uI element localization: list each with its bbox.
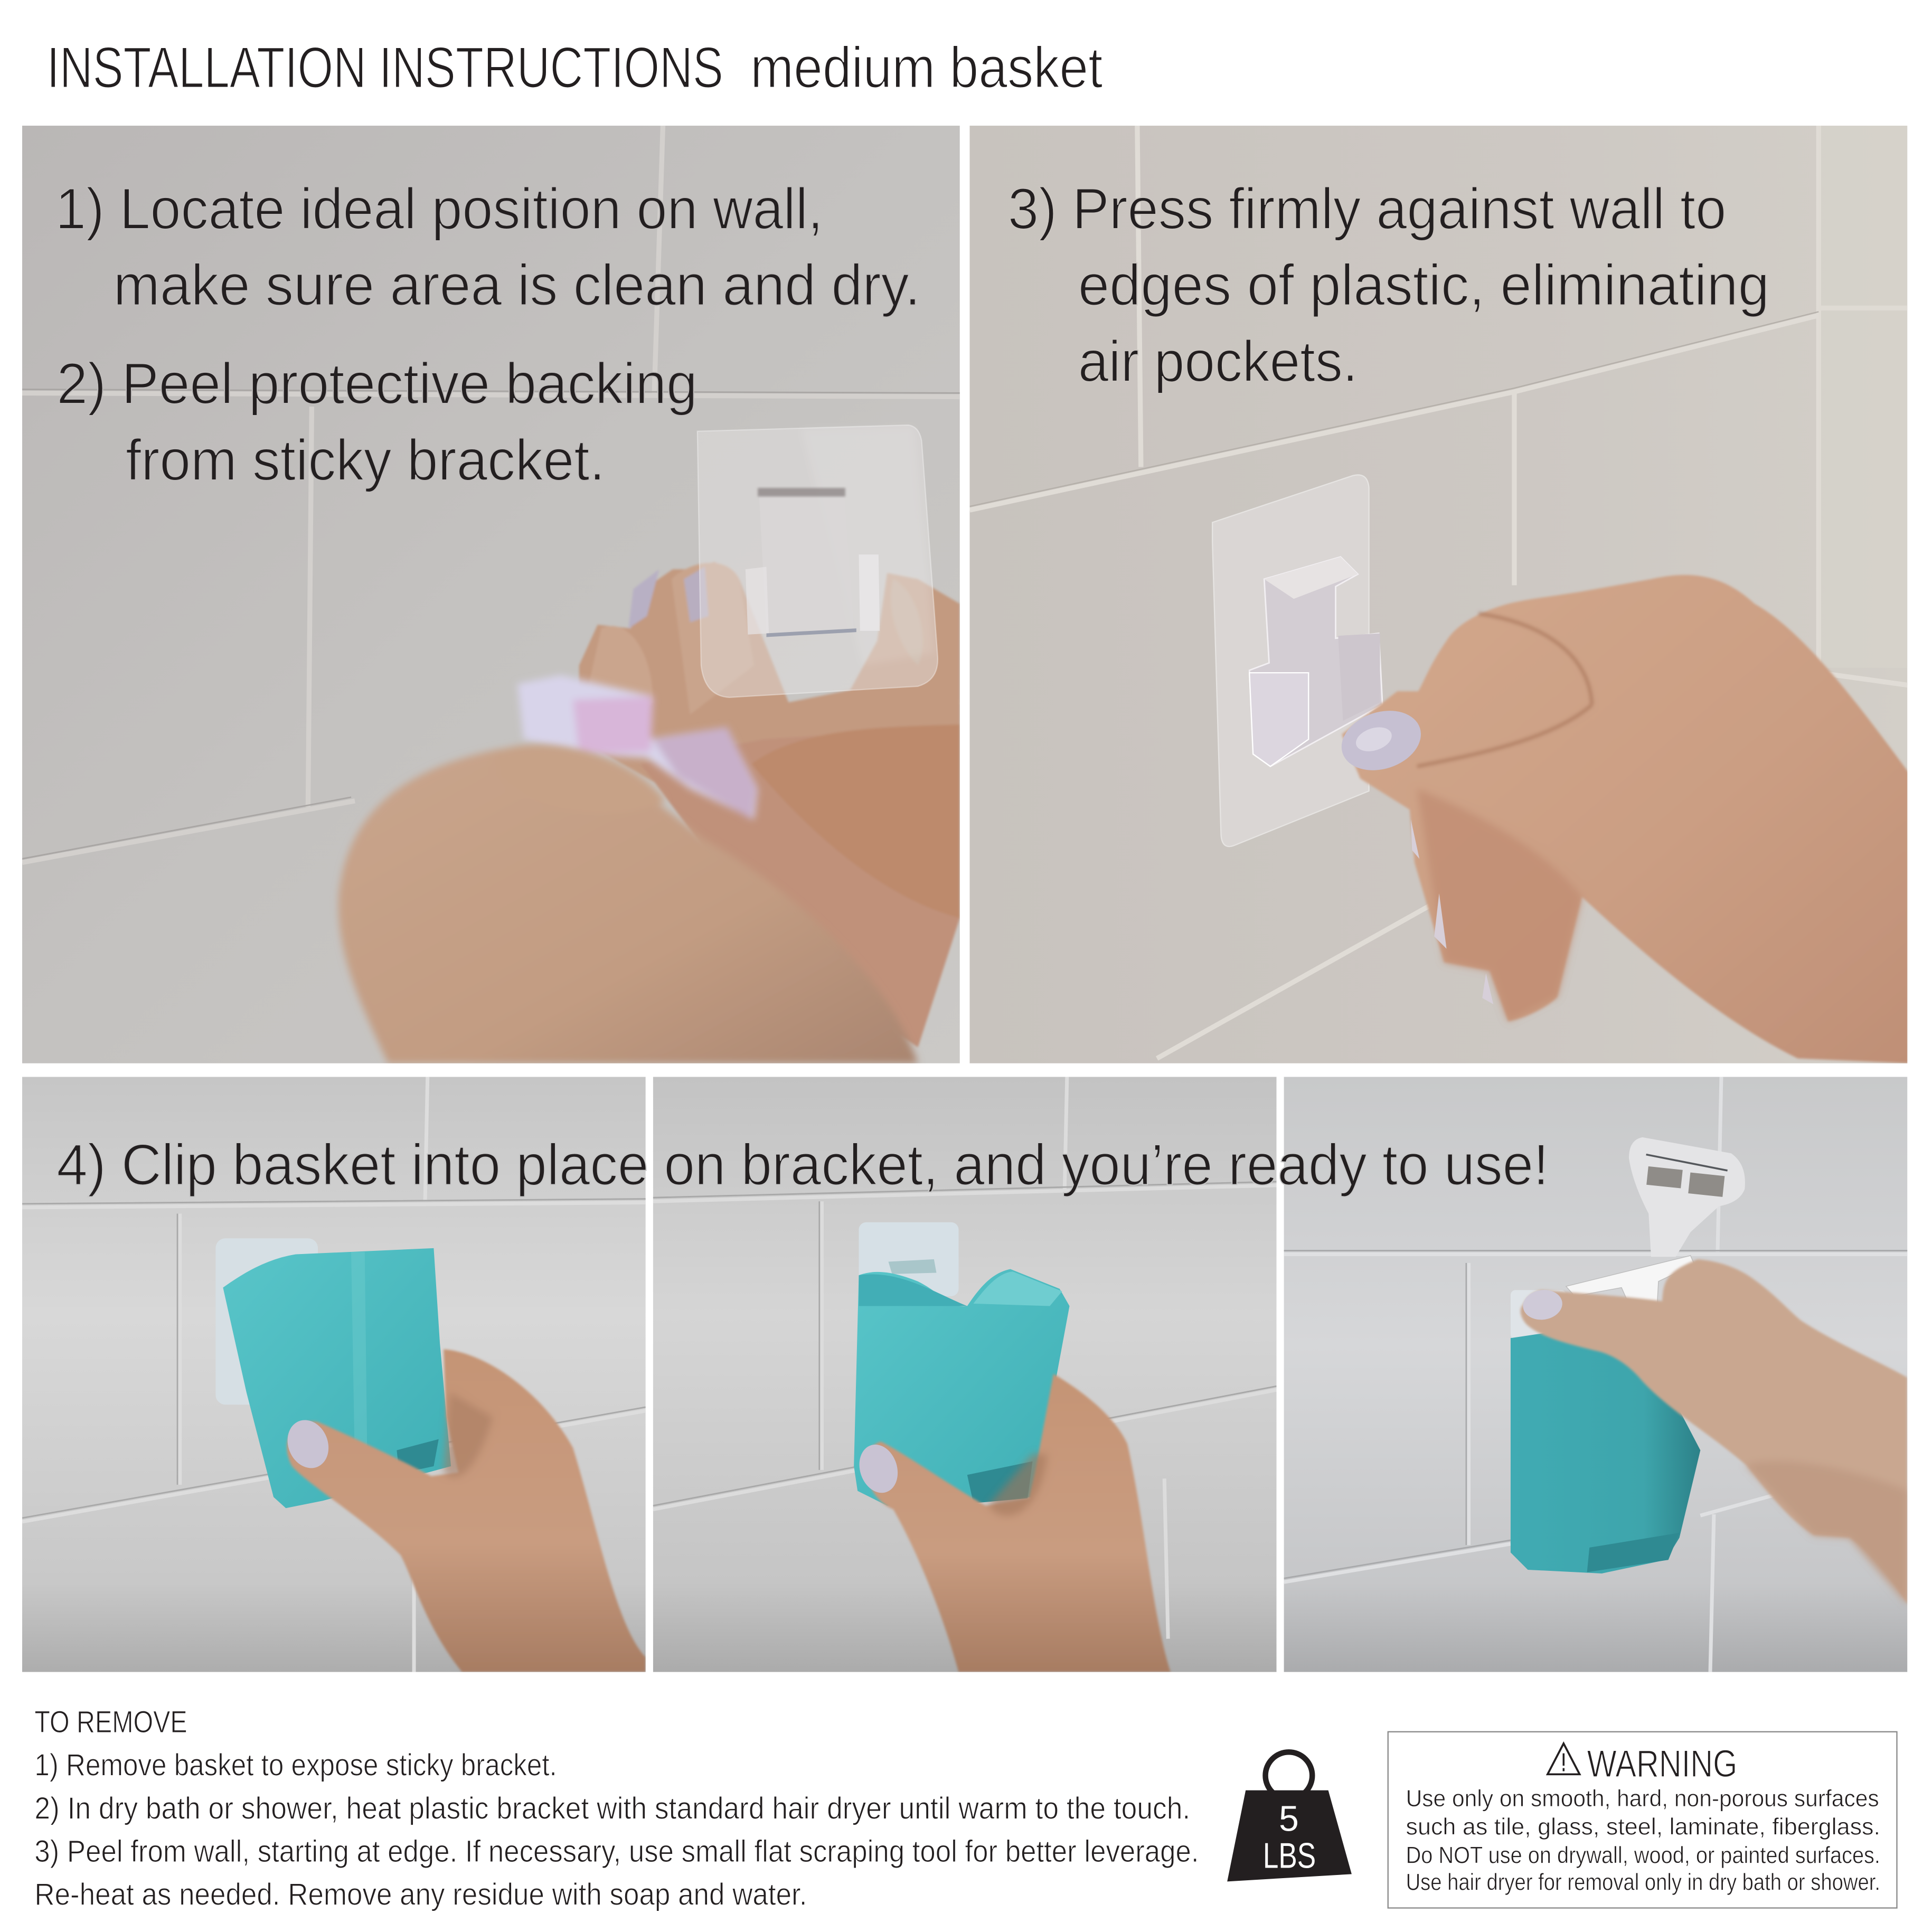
to remove instructions: 3) Peel from wall, starting at edge. If necessary, use small flat scraping tool for better leverage.: [34, 1834, 1199, 1869]
warning box: WARNING: [1587, 1743, 1737, 1785]
panel: steps 1 and 2 photo: [22, 126, 960, 1063]
step 3 text: edges of plastic, eliminating: [1078, 253, 1769, 318]
panel: step 4 photo, razor in basket: [1284, 1077, 1907, 1673]
warning box: Use only on smooth, hard, non-porous surfaces: [1406, 1786, 1879, 1812]
tile wall: [22, 1077, 646, 1672]
basket: [854, 1269, 1070, 1506]
to remove instructions: 2) In dry bath or shower, heat plastic bracket with standard hair dryer until warm to the touch.: [34, 1791, 1190, 1825]
holding hand with bracket: [579, 562, 960, 1048]
to remove instructions: 1) Remove basket to expose sticky bracket.: [34, 1748, 557, 1783]
step 3 text: air pockets.: [1078, 329, 1358, 394]
basket: [1511, 1325, 1700, 1573]
peeled backing: [517, 675, 758, 819]
icon: 5 lbs weight: 5: [1279, 1799, 1299, 1839]
sticky bracket on wall: [1212, 475, 1382, 846]
bracket: [859, 1222, 958, 1296]
icon: warning triangle: [1548, 1743, 1580, 1774]
panel: step 4 photo, basket clipped: [22, 1077, 646, 1672]
to remove instructions: TO REMOVE: [34, 1705, 187, 1739]
warning box: [1388, 1732, 1897, 1908]
step 1 text: [55, 177, 920, 318]
peeling hand: [338, 744, 918, 1063]
warning box: such as tile, glass, steel, laminate, fiberglass.: [1406, 1814, 1880, 1840]
icon: 5 lbs weight: [1227, 1752, 1352, 1881]
step 3 text: [1008, 177, 1769, 394]
step 3 text: 3) Press firmly against wall to: [1008, 177, 1726, 241]
hand: [866, 1374, 1171, 1672]
thumb nail: [853, 1439, 904, 1498]
icon: 5 lbs weight: LBS: [1263, 1836, 1316, 1876]
razor: [1566, 1137, 1745, 1304]
to remove instructions: Re-heat as needed. Remove any residue with soap and water.: [34, 1878, 807, 1912]
tile wall: [653, 1077, 1277, 1672]
panel: step 3 photo: [970, 126, 1909, 1063]
thumb nail: [280, 1414, 335, 1474]
pressing hand: [1342, 575, 1909, 1063]
warning box: Do NOT use on drywall, wood, or painted surfaces.: [1406, 1842, 1880, 1868]
tile wall: [970, 126, 1907, 1063]
sticky bracket held up: [698, 425, 938, 698]
title: medium basket: [750, 36, 1103, 100]
bracket: [215, 1238, 318, 1405]
thumb nail: [1521, 1287, 1564, 1322]
title: INSTALLATION INSTRUCTIONS: [47, 36, 723, 100]
panel: step 4 photo, basket held: [653, 1077, 1277, 1672]
basket: [223, 1248, 451, 1508]
hand: [1521, 1259, 1907, 1604]
step 4 text: 4) Clip basket into place on bracket, and you’re ready to use!: [56, 1133, 1549, 1198]
tile wall: [1284, 1077, 1907, 1673]
step 2 text: from sticky bracket.: [126, 428, 605, 493]
hand: [287, 1349, 646, 1672]
step 1 text: 1) Locate ideal position on wall,: [55, 177, 823, 241]
tile wall: [22, 126, 960, 1063]
step 2 text: 2) Peel protective backing: [56, 352, 698, 416]
step 1 text: make sure area is clean and dry.: [114, 253, 920, 318]
step 2 text: [56, 352, 698, 493]
bracket: [1511, 1290, 1566, 1340]
to remove instructions: [34, 1705, 1199, 1912]
thumb nail: [1334, 701, 1493, 1004]
